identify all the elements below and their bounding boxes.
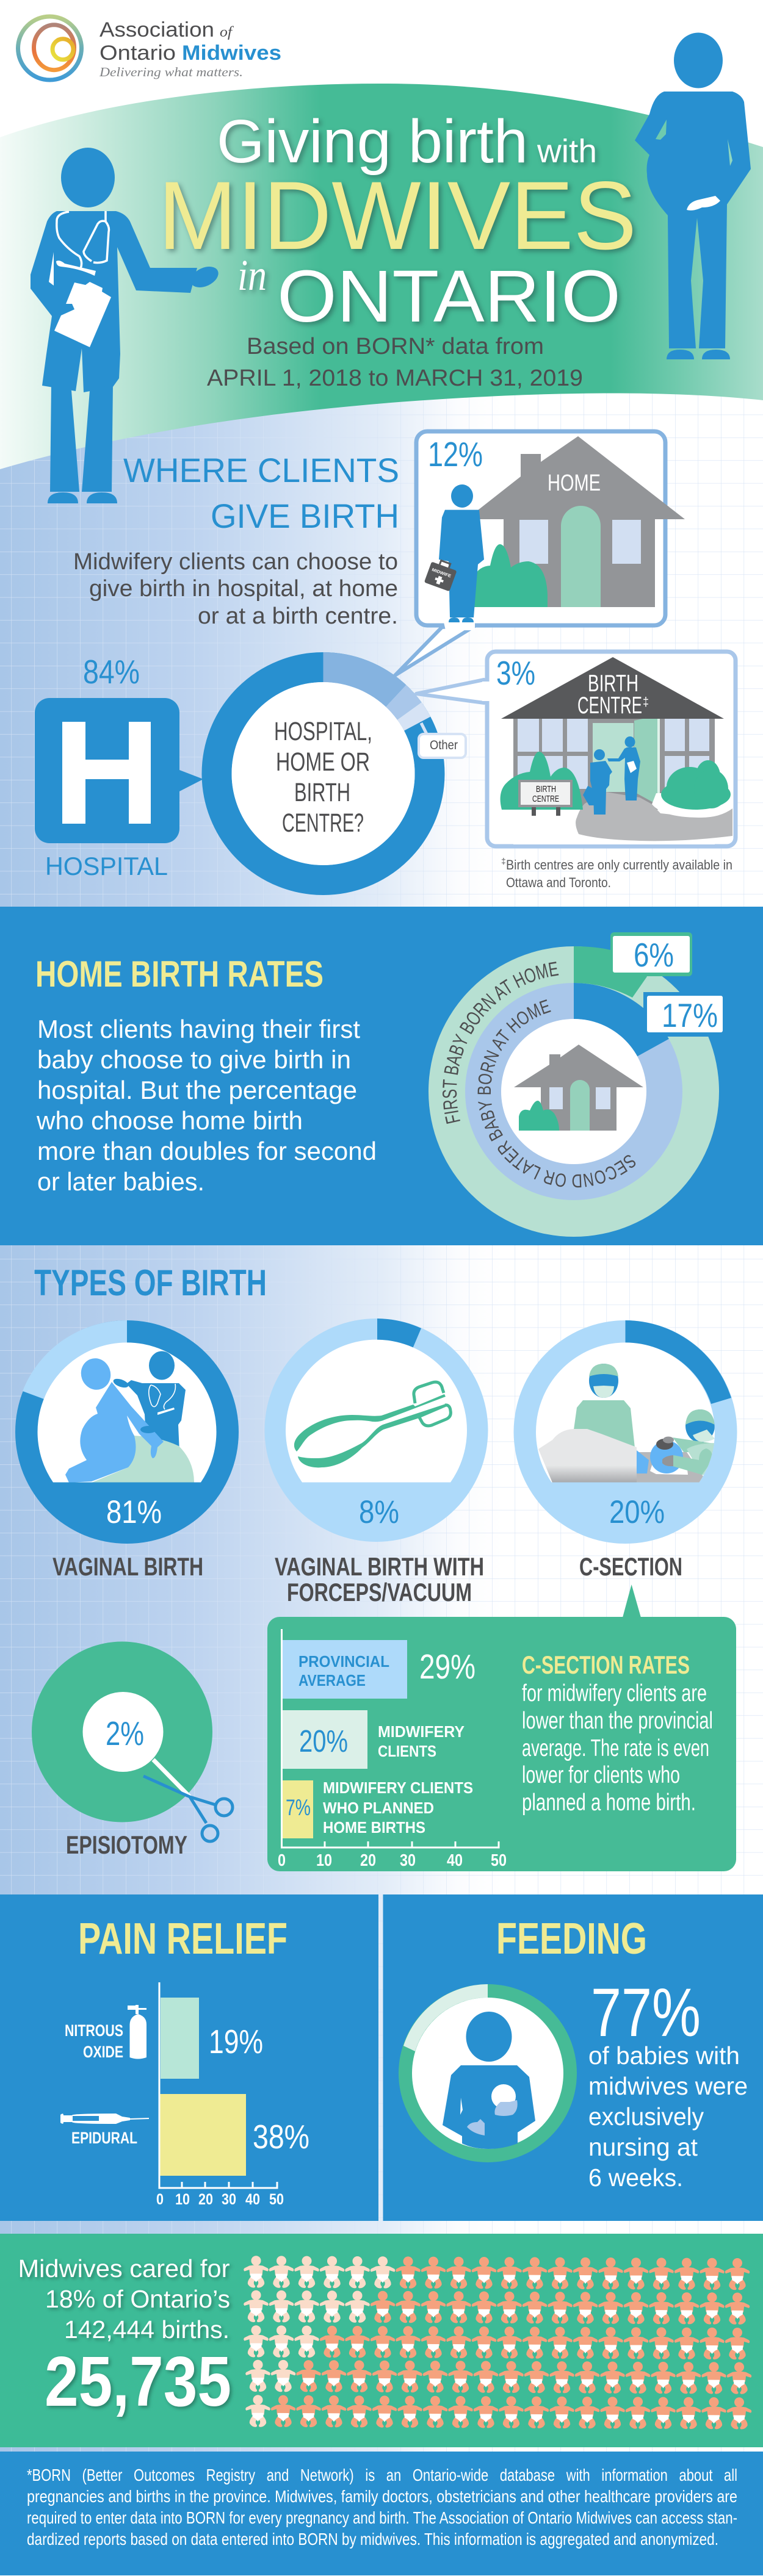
axis labels: 0 — [156, 2191, 164, 2208]
intro text: Midwifery clients can choose to — [73, 549, 398, 575]
hospital tile — [35, 698, 203, 843]
panel: births statistic — [0, 2234, 763, 2447]
feeding text: exclusively — [588, 2103, 704, 2131]
heading: GIVE BIRTH — [211, 497, 399, 535]
label: epidural: EPIDURAL — [71, 2129, 137, 2147]
donut: forceps/vacuum 8% — [265, 1319, 488, 1542]
icon: midwife with bag — [424, 484, 484, 622]
hero background: green wave — [0, 84, 763, 469]
footnote: Ottawa and Toronto. — [506, 875, 611, 890]
logo wordmark: Delivering what matters. — [99, 65, 243, 79]
donut centre question: HOSPITAL, — [274, 717, 372, 746]
heading: HOME BIRTH RATES — [35, 954, 324, 995]
12% stat: 12% — [428, 435, 483, 474]
value: 20%: 20% — [299, 1724, 348, 1758]
feeding text: midwives were — [588, 2072, 748, 2100]
callout: birth centre 3% — [416, 652, 736, 846]
axis labels: 20 — [198, 2191, 213, 2208]
icon: surgical scene — [538, 1364, 717, 1483]
date range: Based on BORN* data from — [247, 334, 544, 359]
value: 19%: 19% — [209, 2023, 263, 2060]
axis labels — [156, 2191, 284, 2208]
icon: house — [466, 436, 685, 607]
axis labels: 0 — [278, 1851, 286, 1869]
intro text: or at a birth centre. — [198, 603, 398, 629]
c-section text — [522, 1650, 713, 1816]
title lines: with — [537, 133, 597, 170]
axis labels: 50 — [491, 1851, 507, 1869]
label: nitrous oxide — [65, 2021, 123, 2061]
label: episiotomy: EPISIOTOMY — [66, 1830, 187, 1859]
icon: client and midwife at door — [583, 736, 640, 815]
axis labels: 50 — [269, 2191, 284, 2208]
label: forceps/vacuum: VAGINAL BIRTH WITH — [275, 1552, 484, 1581]
panel: BORN footnote — [0, 2452, 763, 2575]
label: forceps/vacuum: FORCEPS/VACUUM — [287, 1578, 472, 1606]
2% stat: 2% — [106, 1714, 144, 1752]
body text: hospital. But the percentage — [37, 1076, 357, 1104]
body text: Most clients having their first — [37, 1015, 360, 1043]
axis labels: 10 — [175, 2191, 190, 2208]
bar label: planned home births — [323, 1779, 473, 1837]
value: 29%: 29% — [419, 1647, 476, 1686]
heading — [123, 451, 399, 535]
panel: pain relief — [0, 1894, 378, 2221]
feeding text: 6 weeks. — [588, 2164, 683, 2192]
bar label: midwifery clients: MIDWIFERY — [378, 1722, 465, 1741]
axis labels: 40 — [447, 1851, 463, 1869]
label: nitrous oxide: NITROUS — [65, 2021, 123, 2040]
bar chart: c-section rates — [278, 1629, 507, 1869]
icon: forceps — [294, 1382, 450, 1467]
axis labels: 20 — [360, 1851, 376, 1869]
title — [158, 107, 637, 391]
logo wordmark: of — [220, 24, 234, 40]
panel: c-section rates — [267, 1585, 736, 1871]
panel: types of birth — [15, 1262, 737, 1871]
label: c-section: C-SECTION — [579, 1552, 682, 1581]
c-section text: planned a home birth. — [522, 1790, 696, 1816]
statistic text: Midwives cared for — [18, 2254, 230, 2283]
stat: 17% later babies: 17% — [662, 996, 718, 1034]
title lines: Giving birth — [217, 107, 528, 176]
body text: baby choose to give birth in — [37, 1045, 351, 1074]
axis labels — [278, 1851, 507, 1869]
statistic text: 18% of Ontario’s — [45, 2285, 230, 2313]
bar label: planned home births: MIDWIFERY CLIENTS — [323, 1779, 473, 1797]
hospital label: HOSPITAL — [45, 852, 168, 880]
sign text — [532, 784, 559, 804]
icon: house: HOME — [548, 470, 601, 496]
footnote: Birth centres are only currently available in — [506, 857, 732, 872]
donut centre question: HOME OR — [276, 747, 370, 777]
panel: home birth rates — [0, 907, 763, 1245]
donut: episiotomy 2% — [32, 1641, 233, 1841]
intro text: give birth in hospital, at home — [89, 576, 398, 602]
panel: where clients give birth — [35, 431, 736, 890]
callout: home 12% — [395, 431, 685, 675]
20% stat: 20% — [609, 1494, 665, 1530]
building roof label: BIRTH — [588, 671, 638, 697]
3% stat: 3% — [496, 654, 535, 692]
footnote text — [27, 2466, 737, 2549]
bar label: midwifery clients — [378, 1722, 465, 1760]
axis labels: 10 — [316, 1851, 332, 1869]
building roof label: CENTRE — [577, 693, 642, 719]
81% stat: 81% — [106, 1494, 162, 1530]
heading: WHERE CLIENTS — [123, 451, 399, 489]
icon: gas tank — [128, 2005, 146, 2059]
logo wordmark: Midwives — [182, 41, 281, 65]
logo wordmark: Ontario — [99, 41, 176, 65]
feeding text: nursing at — [588, 2133, 698, 2161]
8% stat: 8% — [359, 1494, 399, 1530]
bar chart: pain relief — [156, 1982, 309, 2208]
label: forceps/vacuum — [275, 1552, 484, 1606]
bar label: midwifery clients: CLIENTS — [378, 1742, 436, 1760]
stat: 77%: 77% — [591, 1974, 701, 2051]
title lines: ONTARIO — [277, 254, 621, 337]
body text — [36, 1015, 377, 1196]
icon: birth centre building — [501, 657, 732, 844]
sign text: CENTRE — [532, 794, 559, 804]
other callout — [419, 723, 466, 758]
donut: vaginal birth 81% — [15, 1320, 239, 1544]
title lines: in — [237, 251, 267, 300]
icon: pregnant client — [635, 33, 751, 359]
bar label: provincial — [298, 1652, 389, 1689]
icon: small house — [514, 1045, 643, 1131]
title lines: MIDWIVES — [158, 161, 637, 270]
building roof label — [577, 671, 649, 719]
statistic text: 142,444 births. — [64, 2315, 230, 2344]
feeding text: of babies with — [588, 2042, 740, 2070]
sign text: BIRTH — [536, 784, 556, 794]
icon: scissors — [143, 1760, 233, 1841]
statistic text — [18, 2254, 231, 2421]
body text: who choose home birth — [36, 1106, 303, 1135]
label: nitrous oxide: OXIDE — [83, 2043, 123, 2061]
body text: more than doubles for second — [37, 1137, 377, 1165]
donut centre question: CENTRE? — [282, 808, 364, 838]
bar label: planned home births: WHO PLANNED — [323, 1799, 434, 1817]
footnote: ‡ — [501, 856, 506, 866]
stat: hospital 84%: 84% — [83, 653, 140, 691]
icon: syringe — [60, 2114, 149, 2124]
intro text — [73, 549, 398, 629]
axis labels: 30 — [400, 1851, 416, 1869]
donut chart: place of birth — [217, 667, 430, 880]
c-section text: C-SECTION RATES — [522, 1650, 690, 1679]
other callout: Other — [430, 738, 458, 752]
panel: feeding — [383, 1894, 763, 2221]
icon: mother and midwife — [65, 1351, 194, 1483]
date range — [207, 334, 583, 391]
heading: FEEDING — [496, 1915, 647, 1963]
pictogram: babies — [244, 2256, 751, 2430]
stat: 6% first baby: 6% — [634, 936, 674, 974]
donut: 77% nursing with mother icon — [399, 1984, 577, 2162]
logo rings — [18, 16, 82, 80]
body text: or later babies. — [37, 1167, 204, 1196]
logo: Association of Ontario Midwives — [18, 16, 281, 80]
icon: midwife with bag: MIDWIFE — [431, 568, 452, 579]
title lines — [158, 107, 637, 337]
donut: c-section 20% — [514, 1320, 737, 1544]
icon: midwife with stethoscope and clipboard — [31, 148, 222, 503]
stat: 6% first baby — [610, 932, 692, 976]
donut centre question — [274, 717, 372, 838]
statistic text: 25,735 — [45, 2342, 231, 2421]
logo wordmark — [99, 18, 281, 79]
value: 38%: 38% — [253, 2118, 309, 2156]
bar label: planned home births: HOME BIRTHS — [323, 1818, 425, 1837]
footnote — [501, 856, 732, 890]
axis labels: 30 — [222, 2191, 236, 2208]
curved label: second or later: SECOND OR LATER BABY BORN AT HOME — [477, 999, 636, 1187]
label: vaginal birth: VAGINAL BIRTH — [52, 1552, 203, 1581]
heading: TYPES OF BIRTH — [34, 1262, 267, 1303]
logo wordmark: Association — [99, 18, 214, 41]
value: 7%: 7% — [286, 1795, 311, 1820]
date range: APRIL 1, 2018 to MARCH 31, 2019 — [207, 365, 583, 391]
heading: PAIN RELIEF — [78, 1915, 287, 1963]
curved label: first baby: FIRST BABY BORN AT HOME — [442, 962, 559, 1124]
bar label: provincial: AVERAGE — [298, 1671, 366, 1689]
building roof label: ‡ — [643, 696, 649, 709]
concentric donut chart — [429, 932, 723, 1237]
feeding text — [588, 2042, 748, 2192]
bar label: provincial: PROVINCIAL — [298, 1652, 389, 1671]
c-section text: lower for clients who — [522, 1762, 680, 1788]
donut centre question: BIRTH — [294, 778, 350, 807]
axis labels: 40 — [245, 2191, 260, 2208]
